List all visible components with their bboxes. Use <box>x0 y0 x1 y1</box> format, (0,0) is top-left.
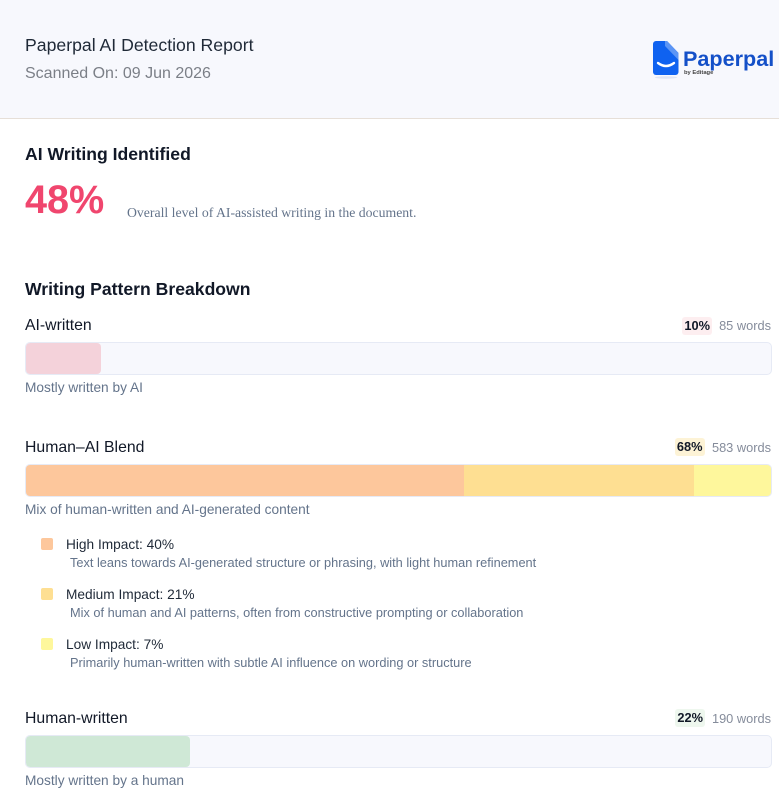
section: Human-AI Blend <box>25 438 772 517</box>
logo: Paperpal <box>653 41 774 79</box>
name: High Impact: 40% <box>66 537 174 552</box>
description: Text leans towards AI-generated structure or phrasing, with light human refinement <box>70 555 536 570</box>
label: AI-written <box>25 317 92 334</box>
progress bar <box>25 735 772 768</box>
percent badge: 10% <box>684 318 710 333</box>
word count: 190 words <box>712 711 771 726</box>
caption: Mix of human-written and AI-generated content <box>25 502 310 517</box>
swatch <box>41 538 53 550</box>
description: Mix of human and AI patterns, often from constructive prompting or collaboration <box>70 605 523 620</box>
swatch <box>41 588 53 600</box>
name: Medium Impact: 21% <box>66 587 195 602</box>
logo byline: by Editage <box>684 70 713 76</box>
description: Primarily human-written with subtle AI influence on wording or structure <box>70 655 472 670</box>
legend: medium impact <box>41 587 523 620</box>
heading: Writing Pattern Breakdown: Writing Pattern Breakdown <box>25 279 250 299</box>
icon: smiling document <box>653 41 678 79</box>
legend: low impact <box>41 637 472 670</box>
word count: 85 words <box>719 318 771 333</box>
legend: high impact <box>41 537 536 570</box>
label: Human-written <box>25 710 128 727</box>
header band <box>0 0 779 119</box>
report title: Paperpal AI Detection Report <box>25 35 253 55</box>
score description: Overall level of AI-assisted writing in the document. <box>127 205 416 220</box>
caption: Mostly written by a human <box>25 773 184 788</box>
word count: 583 words <box>712 440 771 455</box>
stacked progress bar <box>25 464 772 497</box>
progress bar <box>25 342 772 375</box>
scan date: Scanned On: 09 Jun 2026 <box>25 65 211 82</box>
percent badge: 68% <box>677 439 702 454</box>
heading: AI Writing Identified: AI Writing Identified <box>25 144 191 164</box>
logo wordmark: Paperpal <box>683 46 774 71</box>
swatch <box>41 638 53 650</box>
section: Human-written <box>25 709 772 788</box>
label: Human–AI Blend <box>25 439 144 456</box>
section: AI-written <box>25 317 772 395</box>
overall score: 48% <box>25 178 104 222</box>
percent badge: 22% <box>677 710 703 725</box>
caption: Mostly written by AI <box>25 380 143 395</box>
name: Low Impact: 7% <box>66 637 163 652</box>
